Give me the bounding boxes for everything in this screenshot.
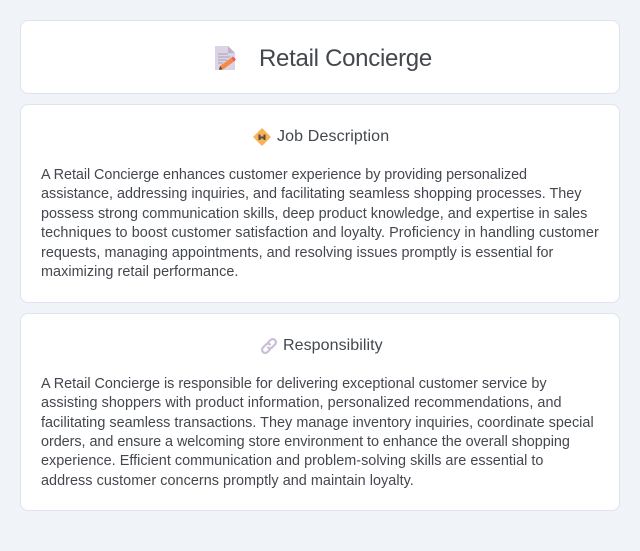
heading: responsibility: Responsibility	[283, 337, 383, 354]
responsibility text: assisting shoppers with product information, personalized recommendations, and	[41, 395, 562, 411]
responsibility text: address customer concerns promptly and maintain loyalty.	[41, 473, 414, 489]
job description text: requests, managing appointments, and resolving issues promptly is essential for	[41, 245, 553, 261]
job description text: techniques to boost customer satisfaction and loyalty. Proficiency in handling customer	[41, 225, 599, 241]
job description text: A Retail Concierge enhances customer experience by providing personalized	[41, 167, 527, 183]
responsibility text: facilitating seamless transactions. They manage inventory inquiries, coordinate special	[41, 415, 594, 431]
panel: title card	[20, 20, 620, 94]
job description text	[41, 167, 599, 280]
job description text: assistance, addressing inquiries, and facilitating seamless shopping processes. They	[41, 186, 581, 202]
panel: job description	[20, 104, 620, 303]
icon: document with pencil	[215, 46, 236, 70]
responsibility text: A Retail Concierge is responsible for delivering exceptional customer service by	[41, 376, 547, 392]
job description text: possess strong communication skills, deep product knowledge, and expertise in sales	[41, 206, 587, 222]
heading: job description: Job Description	[277, 128, 389, 145]
responsibility text: orders, and ensure a welcoming store environment to enhance the overall shopping	[41, 434, 570, 450]
responsibility text	[41, 376, 594, 489]
title: Retail Concierge	[259, 45, 432, 72]
icon: chain link	[261, 338, 277, 354]
icon: diamond road sign	[253, 128, 271, 146]
panel: responsibility	[20, 313, 620, 511]
job description text: maximizing retail performance.	[41, 264, 238, 280]
responsibility text: experience. Efficient communication and problem-solving skills are essential to	[41, 453, 543, 469]
